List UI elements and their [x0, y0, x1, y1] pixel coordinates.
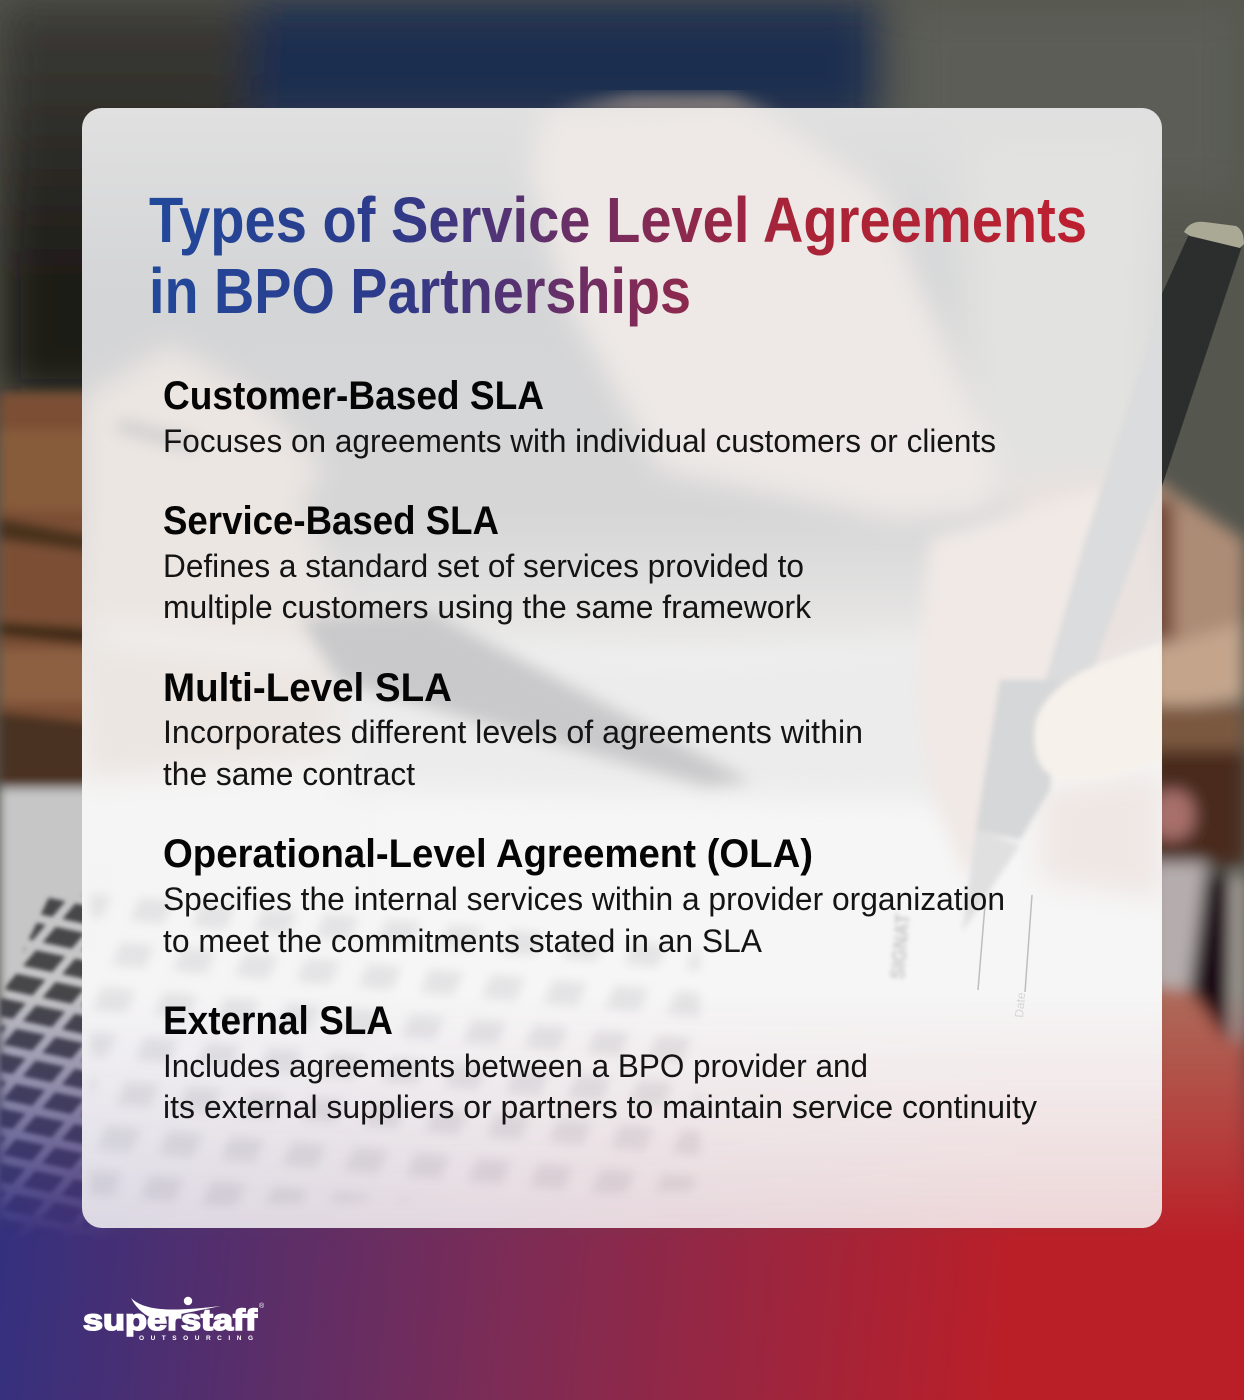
item: Service-Based SLA: Service-Based SLA — [163, 499, 499, 543]
title: in BPO Partnerships — [149, 255, 691, 327]
item: External SLA: External SLA — [163, 999, 393, 1043]
logo: superstaff outsourcing: ® — [259, 1302, 265, 1310]
brand gradient overlay at bottom — [0, 1002, 1244, 1400]
item: Multi-Level SLA — [163, 666, 863, 792]
pen body in panel — [1046, 458, 1156, 684]
panel background: faded photo — [82, 100, 1162, 1228]
title — [149, 184, 1087, 327]
item: Multi-Level SLA: Multi-Level SLA — [163, 666, 452, 710]
signature lines — [978, 905, 985, 990]
logo: superstaff outsourcing — [83, 1297, 265, 1342]
item: Multi-Level SLA: Incorporates different levels of agreements within — [163, 714, 863, 750]
item: Customer-Based SLA: Customer-Based SLA — [163, 374, 544, 418]
left hand fingers — [0, 392, 110, 786]
item: Operational-Level Agreement (OLA) — [163, 832, 1005, 959]
item: External SLA: its external suppliers or partners to maintain service continuity — [163, 1089, 1037, 1125]
faded document text — [90, 870, 700, 1210]
item: Operational-Level Agreement (OLA): to meet the commitments stated in an SLA — [163, 923, 763, 959]
title: Types of Service Level Agreements — [149, 184, 1087, 256]
item: External SLA — [163, 999, 1037, 1125]
panel background: faded photo: Date — [1012, 991, 1028, 1018]
blurred document text, left edge — [0, 895, 90, 1250]
item: Operational-Level Agreement (OLA): Operational-Level Agreement (OLA) — [163, 832, 813, 876]
thumb — [1034, 643, 1162, 781]
item: Multi-Level SLA: the same contract — [163, 756, 415, 792]
right hand — [1150, 476, 1244, 655]
pen body — [1150, 232, 1242, 500]
item: Customer-Based SLA: Focuses on agreements with individual customers or clients — [163, 423, 996, 459]
item: Service-Based SLA: Defines a standard set of services provided to — [163, 548, 804, 584]
logo: superstaff outsourcing: OUTSOURCING — [139, 1335, 253, 1342]
item: Service-Based SLA: multiple customers using the same framework — [163, 589, 812, 625]
item: Operational-Level Agreement (OLA): Specifies the internal services within a provider organization — [163, 881, 1005, 917]
logo: superstaff outsourcing: superstaff — [83, 1304, 258, 1337]
panel background: faded photo: SIGNAT — [887, 913, 915, 980]
item: Customer-Based SLA — [163, 374, 996, 459]
item: External SLA: Includes agreements between a BPO provider and — [163, 1048, 868, 1084]
table and paper — [0, 788, 110, 1400]
item: Service-Based SLA — [163, 499, 812, 625]
translucent content panel — [82, 100, 1162, 1228]
